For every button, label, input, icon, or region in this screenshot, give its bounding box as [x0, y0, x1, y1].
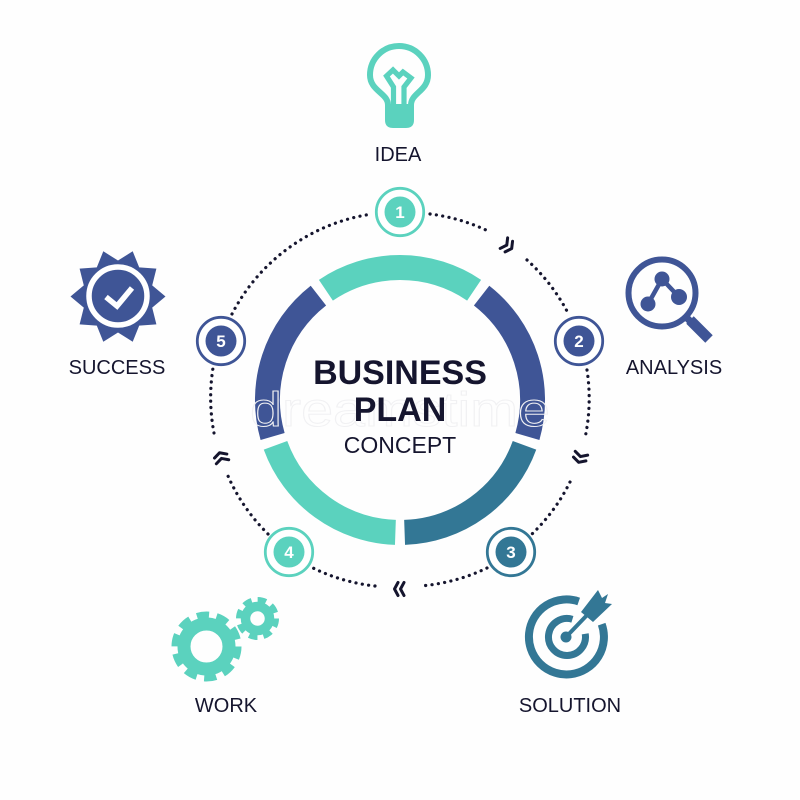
icon: magnifier with network [628, 260, 709, 339]
label: work: WORK [195, 695, 258, 717]
icon: success badge [70, 251, 166, 342]
segment: analysis [482, 296, 533, 436]
icon: gears [176, 600, 276, 678]
icon: light bulb [370, 46, 428, 128]
node 3 [487, 528, 535, 576]
node 5: 5 [216, 332, 226, 351]
node 2: 2 [574, 332, 584, 351]
center title [313, 354, 487, 458]
label: analysis: ANALYSIS [626, 357, 722, 379]
label: idea: IDEA [375, 144, 422, 166]
dotted connector ring [211, 214, 589, 586]
node 5 [197, 317, 245, 365]
chevron 4 to 5 [213, 451, 229, 464]
label: solution: SOLUTION [519, 695, 621, 717]
segment: success [267, 296, 318, 436]
central segmented ring [267, 268, 533, 532]
chevrons: direction arrows [213, 238, 588, 596]
segment: idea [326, 268, 474, 290]
node 3: 3 [506, 543, 516, 562]
center title: PLAN [354, 391, 446, 429]
watermark: dreamstime [250, 384, 550, 437]
node 1 [376, 188, 424, 236]
center title: BUSINESS [313, 354, 487, 392]
node 2 [555, 317, 603, 365]
chevron 1 to 2 [500, 238, 515, 254]
center title: CONCEPT [344, 432, 456, 458]
node 1: 1 [395, 203, 405, 222]
chevron 3 to 4 [394, 582, 404, 596]
node 4 [265, 528, 313, 576]
node 4: 4 [284, 543, 294, 562]
label: success: SUCCESS [69, 357, 165, 379]
segment: solution [405, 445, 524, 532]
segment: work [276, 445, 395, 532]
icon: target with arrow [529, 590, 612, 674]
chevron 2 to 3 [572, 451, 588, 464]
